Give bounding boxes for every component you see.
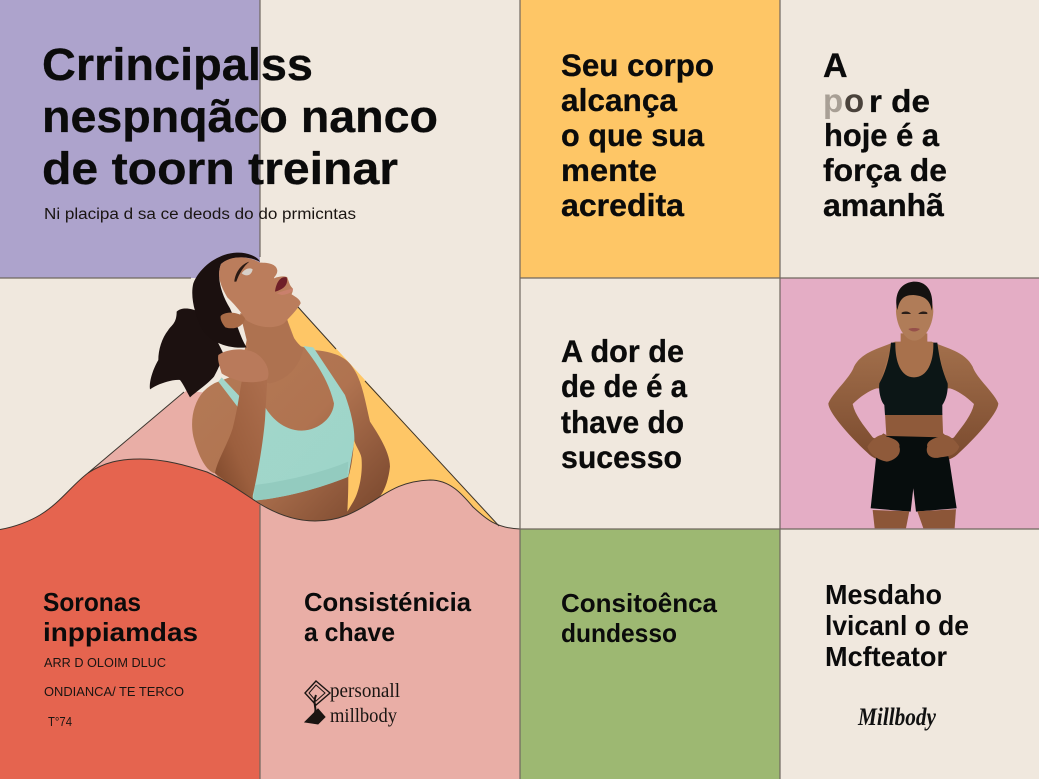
sports bra — [879, 343, 948, 415]
heading: Mesdaho — [825, 579, 942, 610]
heading: lvicanl o de — [825, 610, 969, 641]
quote: yellow panel — [561, 47, 714, 223]
heading: inppiamdas — [43, 617, 198, 647]
quote: top right panel: A — [823, 47, 848, 85]
small text: T°74 — [48, 715, 72, 729]
quote: yellow panel: alcança — [561, 82, 677, 118]
torso and far arm — [192, 318, 390, 523]
title: de toorn treinar — [42, 143, 398, 194]
hands — [867, 435, 900, 462]
panel: lavender title block — [0, 0, 260, 278]
logo text: millbody — [330, 706, 397, 727]
man mouth — [908, 328, 920, 331]
neck — [240, 313, 303, 383]
small text: ONDIANCA/ TE TERCO — [44, 685, 184, 699]
quote: top right panel — [823, 47, 947, 223]
quote: centre panel: thave do — [561, 404, 684, 440]
eyebrow — [234, 262, 249, 282]
quote: top right panel: amanhã — [823, 187, 944, 223]
quote: centre panel: de de é a — [561, 368, 687, 404]
hand — [218, 349, 268, 382]
eye — [242, 268, 253, 275]
heading — [304, 587, 472, 647]
shape: yellow triangle behind athlete — [280, 307, 500, 530]
arms and shoulders — [828, 342, 998, 461]
heading: Soronas — [43, 587, 141, 617]
icon: personal millbody logo — [305, 681, 330, 724]
man hair — [896, 282, 932, 311]
card: Mesdaho — [825, 579, 969, 731]
sports top — [218, 346, 354, 501]
raised arm — [215, 378, 267, 500]
panel: pink figure block — [780, 278, 1039, 529]
face — [219, 257, 301, 327]
athlete: man with hands on hips — [828, 282, 998, 528]
quote: yellow panel: acredita — [561, 187, 684, 223]
quote: top right panel: r de — [869, 83, 930, 119]
quote: centre panel: sucesso — [561, 439, 682, 475]
quote: top right panel: p — [823, 82, 843, 119]
title — [42, 39, 438, 194]
small text: ARR D OLOIM DLUC — [44, 655, 166, 670]
title: Crrincipalss — [42, 39, 313, 90]
logo text: personall — [330, 681, 401, 702]
panel: coral wave block — [0, 459, 260, 779]
card: green panel heading: Consitoênca — [561, 588, 718, 618]
top band — [253, 462, 348, 501]
heading: Consisténicia — [304, 587, 472, 617]
gap between arm and waist — [347, 440, 362, 512]
quote: yellow panel: mente — [561, 152, 657, 188]
card: Soronas — [43, 587, 198, 729]
panel: salmon wave block — [260, 480, 520, 779]
card: green panel heading: dundesso — [561, 618, 677, 648]
lower lip — [277, 288, 293, 295]
heading: Mcfteator — [825, 641, 947, 672]
small text — [44, 655, 184, 729]
quote: centre panel: A dor de — [561, 333, 684, 369]
athlete: woman looking up — [150, 253, 390, 523]
quote: top right panel: força de — [823, 152, 947, 188]
hair — [192, 253, 260, 348]
panel: green block — [520, 529, 780, 779]
card: Consistência — [304, 587, 472, 727]
heading: a chave — [304, 617, 395, 647]
head — [896, 293, 933, 341]
ponytail — [150, 309, 223, 397]
logo text — [330, 681, 401, 727]
shorts — [871, 436, 957, 512]
heading — [43, 587, 198, 647]
quote: centre panel — [561, 333, 687, 475]
ear — [221, 313, 245, 328]
waist — [885, 413, 943, 441]
neck and chest — [880, 333, 947, 383]
subtitle: Ni placipa d sa ce deods do do prmicntas — [44, 206, 356, 223]
card: green panel heading — [561, 588, 718, 648]
script logo: Millbody — [857, 704, 937, 731]
man face details — [902, 311, 927, 314]
quote: yellow panel: o que sua — [561, 117, 704, 153]
quote: yellow panel: Seu corpo — [561, 47, 714, 83]
heading — [825, 579, 969, 672]
panel: yellow quote block — [520, 0, 780, 278]
wave outline — [0, 459, 520, 530]
legs — [873, 510, 909, 528]
shape: salmon triangle behind athlete — [88, 391, 300, 530]
title: nespnqãco nanco — [42, 91, 438, 142]
mouth — [275, 277, 287, 292]
quote: top right panel: hoje é a — [824, 117, 939, 153]
quote: top right panel: o — [844, 82, 864, 119]
